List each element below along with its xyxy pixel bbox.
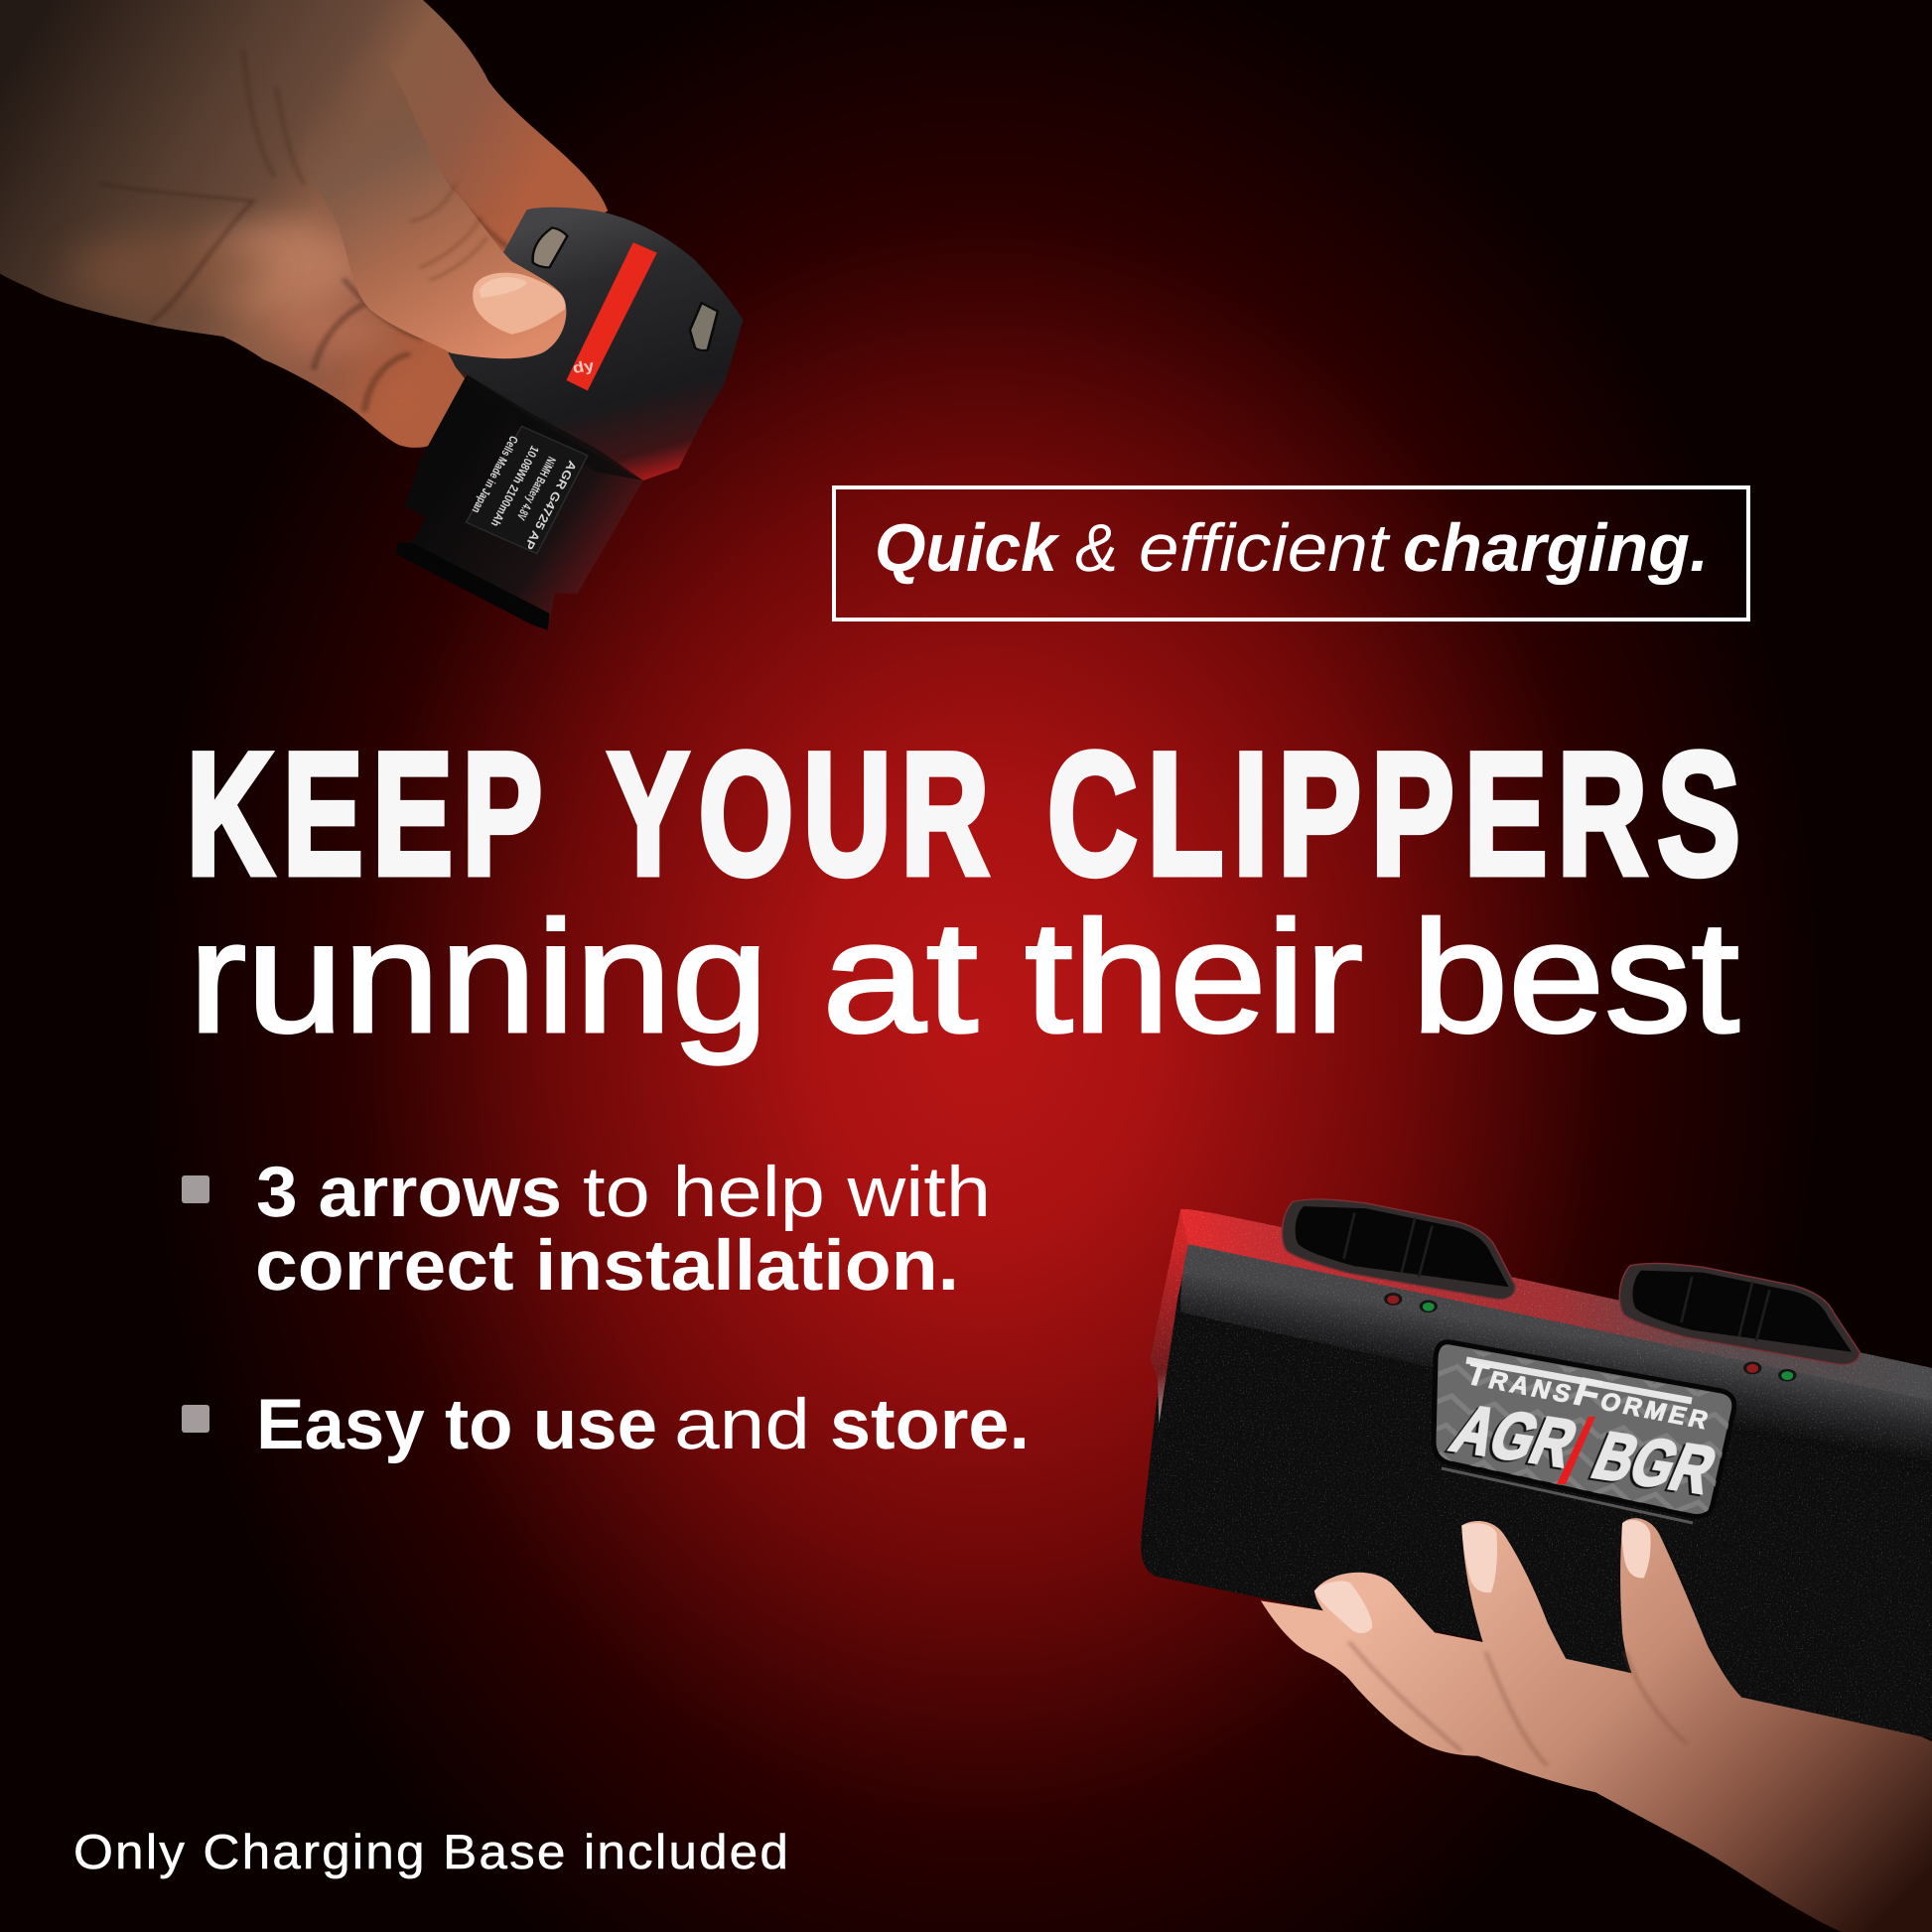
indicator lights left [1384,1293,1438,1312]
callout: quick and efficient charging [834,487,1748,620]
callout: quick and efficient charging: & [1075,510,1118,586]
finger left [1314,1573,1537,1753]
heading line 1 [187,718,1750,911]
callout: quick and efficient charging: efficient [1139,510,1391,586]
callout: quick and efficient charging: Quick [875,510,1060,586]
metal contact right [690,303,718,350]
heading line 2: at [822,888,978,1065]
footnote: Only Charging Base included [73,1826,790,1879]
heading line 2 [189,888,1739,1065]
callout: quick and efficient charging: charging. [1403,510,1709,586]
charger body [1141,1209,1932,1739]
badge BGR: BGR [1583,1419,1726,1507]
photo: hand holding battery [0,0,743,630]
badge AGR: AGR [1442,1392,1587,1481]
red strip [566,242,657,391]
battery collar shadow [456,367,643,481]
battery label text: 10.08Wh 2100mAh [488,444,542,529]
strip logo: dy [571,356,596,376]
charger slots and lights [1282,1199,1860,1382]
left side face [1150,1209,1196,1424]
bullet 1: 3 arrows [256,1153,562,1232]
finger right [1620,1518,1761,1743]
badge top bar [1466,1360,1692,1401]
thumb [303,58,566,358]
photo: palm and charger body [1141,1209,1932,1932]
indicator lights right [1743,1361,1796,1382]
fingers over charger [1314,1518,1761,1768]
charger texture grain [1141,1209,1932,1739]
bullet 1: to help with [583,1153,991,1232]
heading line 2: running [189,888,768,1065]
bullet 2 [182,1385,1030,1464]
bullet list [182,1153,1030,1464]
heading line 2: best [1412,888,1739,1065]
bullet 2: and [674,1385,810,1464]
heading line 1: YOUR [608,718,999,911]
badge bottom lip [1442,1468,1693,1523]
metal contact left [533,227,567,267]
battery pack [396,207,743,630]
battery label text: NiMH Battery 4.8V [514,455,559,522]
battery label plate [466,426,588,554]
badge brand: TRANSFORMER [1461,1350,1716,1438]
shoulder highlight [1180,1244,1932,1477]
left slot [1282,1199,1515,1300]
battery neck [396,376,643,630]
bullet 1 [182,1153,991,1306]
bullet 2: Easy to use [256,1385,657,1464]
hand and fingers [0,0,608,448]
battery head [449,207,743,481]
right slot [1619,1263,1860,1364]
bullet 1: correct installation. [255,1226,959,1306]
bullet 2: store. [830,1385,1030,1464]
battery label text: Cells Made in Japan [469,434,521,515]
battery flange [396,542,550,630]
finger middle [1461,1521,1590,1768]
heading [187,718,1750,1065]
product badge [1434,1342,1734,1523]
heading line 2: their [1025,888,1363,1065]
battery label text: AGR G4725 AP [521,459,580,552]
badge slash [1557,1417,1595,1484]
top surface [1180,1209,1932,1404]
heading line 1: KEEP [187,718,552,911]
palm and wrist [1261,1600,1932,1932]
battery label text [469,434,580,552]
